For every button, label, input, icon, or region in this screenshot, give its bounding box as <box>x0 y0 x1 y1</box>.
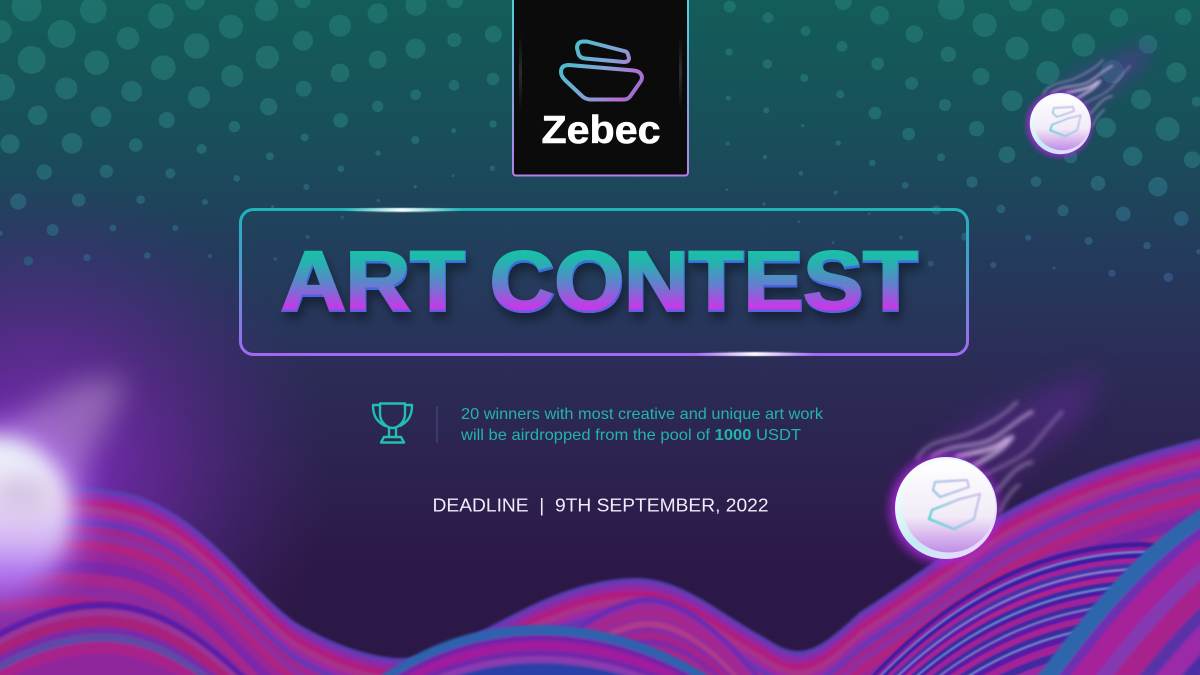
left planet <box>0 378 125 608</box>
icon: Zebec logo <box>561 42 642 100</box>
coin logo <box>929 480 980 529</box>
dot pattern: right <box>724 0 1200 282</box>
prize description <box>460 406 823 444</box>
purple glow behind left planet <box>0 180 330 675</box>
prize description: will be airdropped from the pool of 1000 USDT <box>460 427 801 444</box>
comet tail <box>917 387 1087 512</box>
dot pattern: left <box>0 0 502 266</box>
deadline: DEADLINE | 9TH SEPTEMBER, 2022 <box>432 496 768 516</box>
prize description: 20 winners with most creative and unique art work <box>461 406 823 423</box>
coin: lower right comet <box>890 387 1087 563</box>
coin logo <box>1050 107 1081 136</box>
title panel <box>240 208 968 356</box>
coin face <box>1034 94 1090 150</box>
title text: ART CONTEST <box>281 234 918 328</box>
logo panel <box>513 0 688 176</box>
icon: trophy <box>373 404 412 442</box>
divider <box>436 406 438 443</box>
coin face <box>902 460 996 552</box>
flowing wave ribbons <box>0 437 1200 675</box>
comet tail <box>1043 51 1145 126</box>
wordmark: Zebec <box>542 109 660 152</box>
coin: upper right comet <box>1027 51 1145 157</box>
planet tail <box>0 378 125 510</box>
